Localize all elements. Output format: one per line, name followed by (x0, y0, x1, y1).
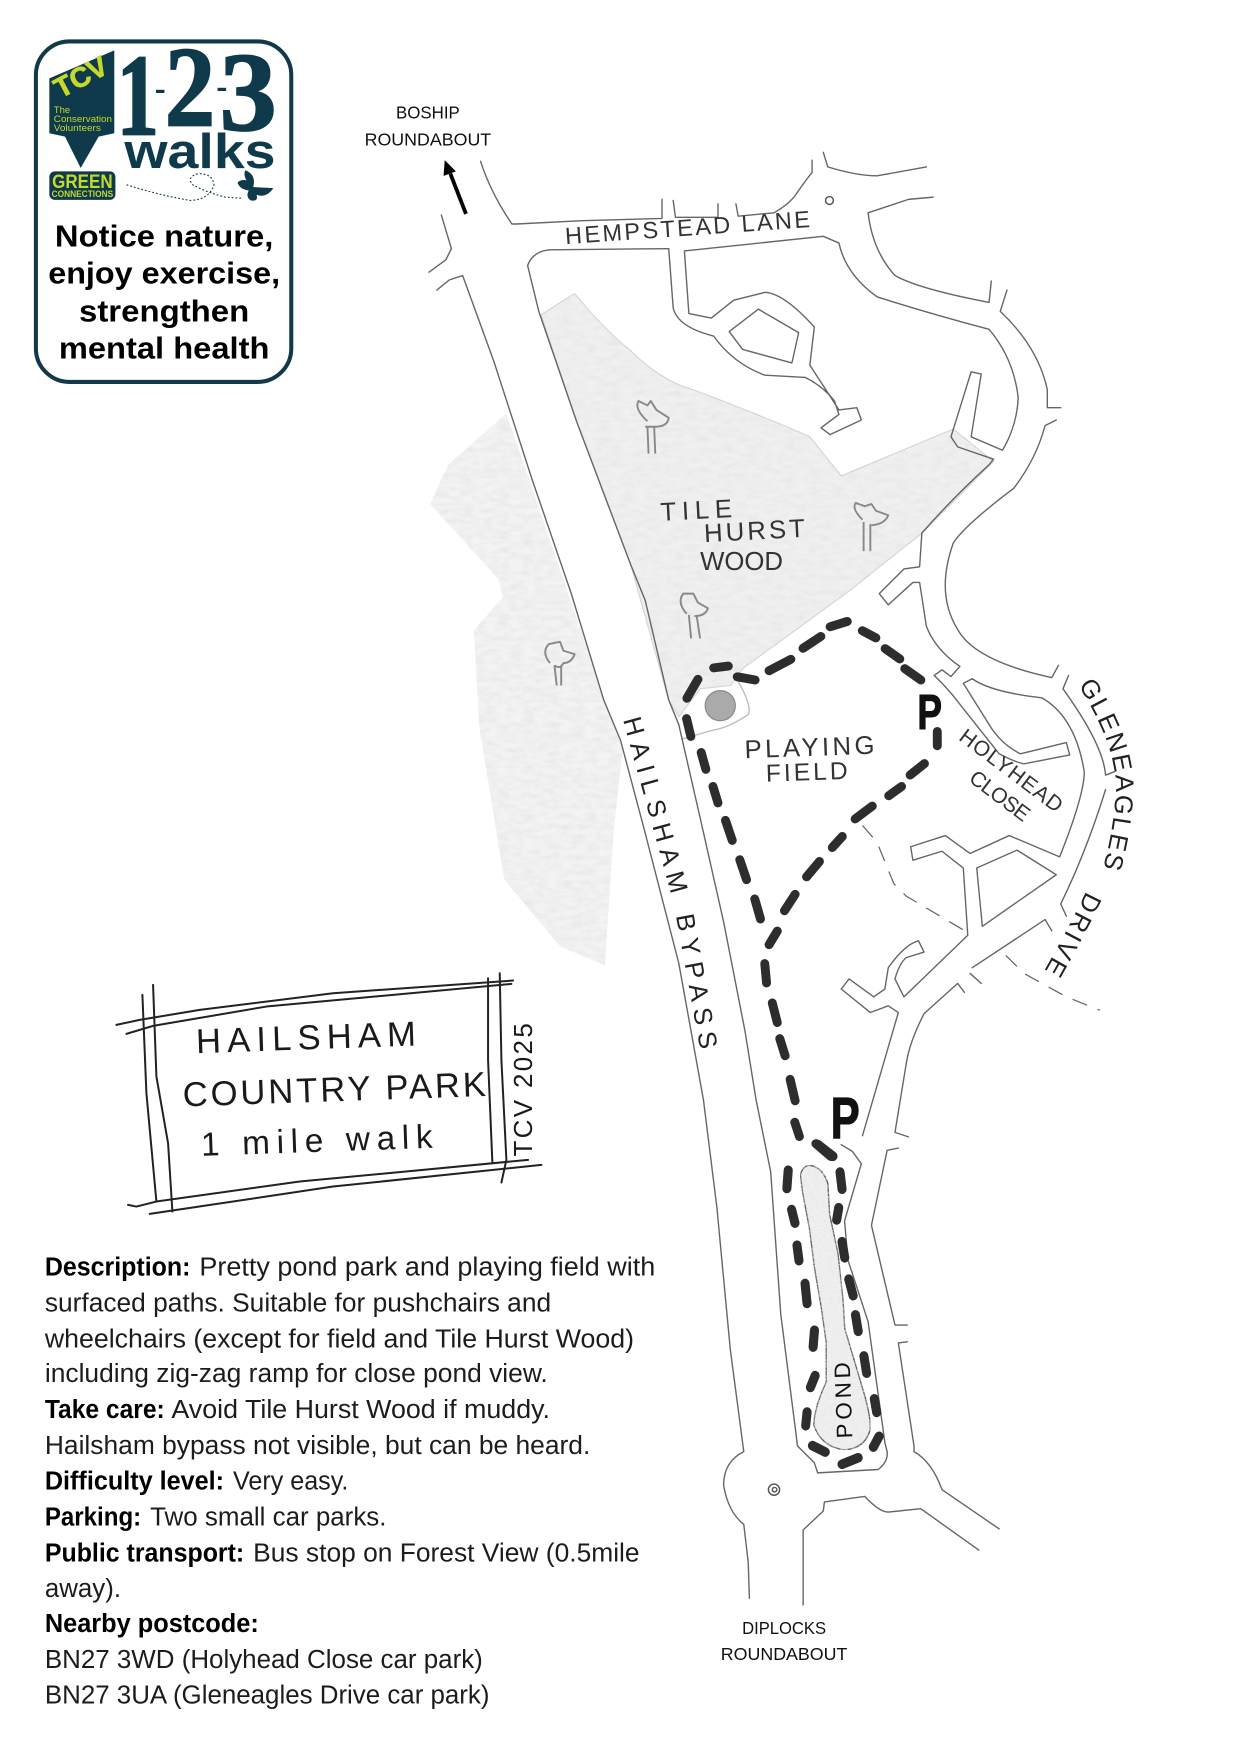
nearby postcodes: Nearby postcode: (45, 1610, 259, 1638)
badge: green connections: GREEN (52, 172, 113, 193)
map title (182, 1016, 486, 1164)
label: Tile Hurst Wood (660, 495, 806, 576)
take care (45, 1396, 590, 1460)
strapline: strengthen (79, 293, 249, 328)
logo title: 1-2-3: - (216, 72, 227, 102)
nearby postcodes: BN27 3UA (Gleneagles Drive car park) (45, 1682, 490, 1710)
description: surfaced paths. Suitable for pushchairs and (45, 1290, 551, 1318)
public transport: Public transport: (45, 1539, 244, 1567)
label: Playing Field (744, 732, 875, 788)
label: Pond: POND (830, 1362, 857, 1439)
label: Boship roundabout (365, 103, 491, 150)
title sketch box (116, 973, 541, 1214)
label: Holyhead Close: HOLYHEAD (955, 724, 1068, 817)
nearby postcodes (45, 1610, 490, 1710)
logo title: 1-2-3: 2 (165, 23, 215, 150)
walk information text (44, 1254, 655, 1710)
take care: Hailsham bypass not visible, but can be heard. (45, 1432, 590, 1460)
woodland shading: west of bypass (430, 413, 623, 965)
map title: 1 mile walk (200, 1119, 434, 1164)
label: Tile Hurst Wood: HURST (703, 515, 806, 548)
label: Boship roundabout: BOSHIP (396, 103, 460, 123)
parking marker: Holyhead Close: P (917, 685, 942, 740)
walking route, thick dashed (687, 621, 937, 1157)
strapline: enjoy exercise, (48, 255, 280, 290)
label: Hailsham Bypass: HAILSHAM BYPASS (624, 717, 717, 1048)
logo title: 1-2-3 (117, 23, 277, 160)
roads (429, 152, 1115, 1605)
icon: tree 3 (681, 594, 708, 638)
description: Pretty pond park and playing field with (199, 1254, 655, 1282)
difficulty level: Very easy. (233, 1468, 348, 1496)
icon: TCV map pin: TCV (49, 50, 113, 104)
icon: tree 1 (637, 401, 669, 454)
parking: Parking: (45, 1504, 141, 1532)
footpaths, thin dashed (862, 825, 1100, 1010)
map title: COUNTRY PARK (182, 1066, 486, 1115)
arrow to Boship roundabout (444, 160, 466, 214)
logo title: 1-2-3: - (155, 75, 166, 105)
map title: HAILSHAM (195, 1016, 417, 1061)
description: Description: (45, 1254, 190, 1282)
icon: butterfly (238, 170, 273, 201)
label: Hempstead Lane: HEMPSTEAD LANE (564, 206, 811, 249)
small pond near playing field (681, 675, 749, 739)
description: wheelchairs (except for field and Tile Hurst Wood) (44, 1325, 634, 1353)
roundabout markers (768, 197, 833, 1495)
label: Gleneagles: GLENEAGLES (1082, 680, 1134, 870)
trees (545, 401, 888, 685)
woodland shading: Tile Hurst Wood (541, 293, 994, 717)
icon: TCV map pin: Conservation (54, 114, 112, 125)
nearby postcodes: BN27 3WD (Holyhead Close car park) (45, 1646, 483, 1674)
badge: green connections: CONNECTIONS (52, 189, 113, 199)
map (346, 103, 1134, 1664)
label: Diplocks roundabout: DIPLOCKS (742, 1618, 826, 1638)
difficulty level: Difficulty level: (45, 1468, 224, 1496)
logo title: 1-2-3: 1 (117, 31, 159, 160)
public transport: away). (45, 1575, 121, 1603)
parking: Two small car parks. (150, 1504, 386, 1532)
icon: tree 2 (854, 503, 888, 551)
badge: green connections (49, 171, 115, 200)
pond (800, 1165, 870, 1450)
label: Drive: DRIVE (1044, 892, 1102, 978)
public transport: Bus stop on Forest View (0.5mile (253, 1539, 640, 1567)
icon: tree 4 (545, 642, 575, 685)
label: Diplocks roundabout (721, 1618, 847, 1664)
icon: TCV map pin: The (54, 105, 70, 116)
icon: TCV map pin: Volunteers (54, 123, 101, 134)
hand-drawn frame (116, 973, 541, 1214)
parking marker: Gleneagles Drive: P (831, 1086, 860, 1151)
label: Tile Hurst Wood: TILE (660, 495, 733, 527)
label: Diplocks roundabout: ROUNDABOUT (721, 1644, 847, 1664)
label: Tile Hurst Wood: WOOD (700, 548, 783, 576)
label: Playing Field: PLAYING (744, 732, 875, 764)
public transport (45, 1539, 640, 1603)
label: Boship roundabout: ROUNDABOUT (365, 130, 491, 150)
curved road labels (624, 680, 1134, 1048)
logo panel: 1-2-3 walks (36, 23, 291, 382)
icon: TCV map pin (49, 50, 114, 168)
label: Holyhead Close: CLOSE (965, 766, 1035, 826)
logo title: walks: walks (123, 124, 276, 179)
take care: Avoid Tile Hurst Wood if muddy. (171, 1396, 550, 1424)
description (44, 1254, 655, 1388)
credit: TCV 2025 (508, 1023, 538, 1157)
parking (45, 1504, 386, 1532)
panel border (36, 41, 291, 382)
description: including zig-zag ramp for close pond view. (45, 1360, 548, 1388)
difficulty level (45, 1468, 348, 1496)
strapline: Notice nature, (55, 218, 273, 253)
strapline (48, 218, 280, 365)
walking route around pond (787, 1145, 879, 1464)
logo title: 1-2-3: 3 (220, 31, 277, 155)
take care: Take care: (45, 1396, 165, 1424)
dotted flight path (127, 174, 243, 200)
label: Playing Field: FIELD (765, 758, 848, 788)
strapline: mental health (59, 330, 269, 365)
